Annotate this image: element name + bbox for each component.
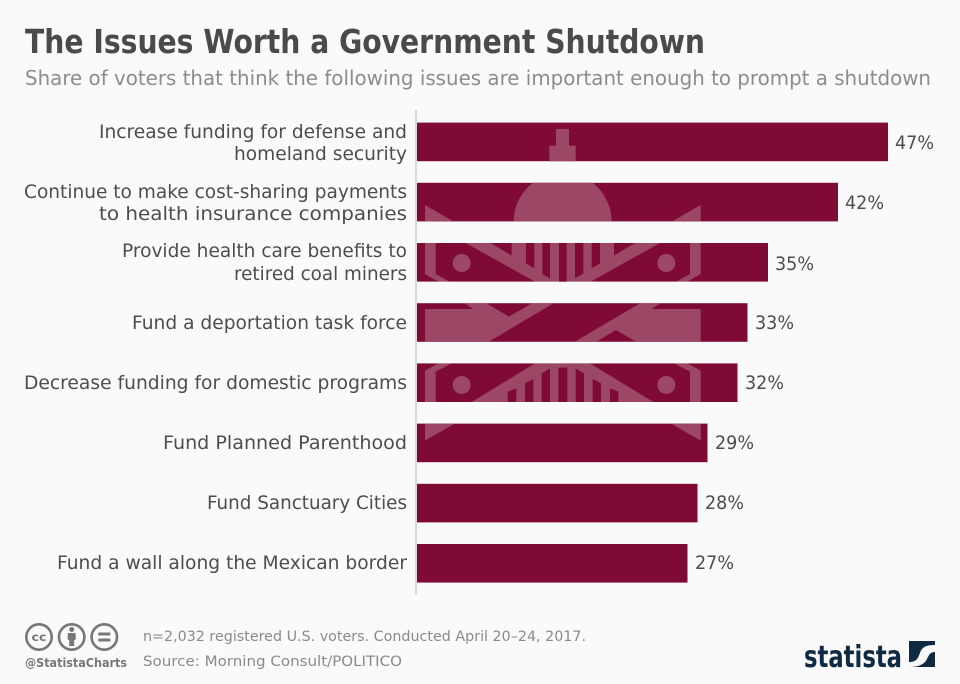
category labels: Fund a deportation task force xyxy=(132,312,407,334)
category labels: Decrease funding for domestic programs xyxy=(24,372,407,394)
axis line xyxy=(415,110,417,595)
value labels: 47% xyxy=(895,132,934,154)
category labels: Continue to make cost-sharing payments xyxy=(24,181,407,203)
category labels: to health insurance companies xyxy=(99,203,407,225)
value labels: 32% xyxy=(745,372,784,394)
footnote: n=2,032 registered U.S. voters. Conducted April 20–24, 2017. xyxy=(143,629,586,645)
value labels: 33% xyxy=(755,312,794,334)
social handle: @StatistaCharts xyxy=(25,656,127,670)
value labels xyxy=(695,132,934,574)
category labels: homeland security xyxy=(234,143,407,165)
value labels: 27% xyxy=(695,552,734,574)
subtitle: Share of voters that think the following issues are important enough to prompt a shutdown xyxy=(25,66,931,90)
category labels: Fund Planned Parenthood xyxy=(163,432,407,454)
category labels: Provide health care benefits to xyxy=(122,240,407,262)
value labels: 42% xyxy=(845,192,884,214)
category labels: Fund Sanctuary Cities xyxy=(207,492,407,514)
bar chart xyxy=(24,110,934,595)
title: The Issues Worth a Government Shutdown xyxy=(25,23,705,61)
bars xyxy=(417,123,888,583)
category labels: retired coal miners xyxy=(234,263,407,285)
source: Source: Morning Consult/POLITICO xyxy=(143,654,402,670)
icon: capitol watermark xyxy=(425,129,701,441)
category labels: Increase funding for defense and xyxy=(99,121,407,143)
category labels: Fund a wall along the Mexican border xyxy=(57,552,407,574)
icon: creative commons licence xyxy=(26,624,117,650)
value labels: 28% xyxy=(705,492,744,514)
value labels: 29% xyxy=(715,432,754,454)
icon: creative commons licence: cc xyxy=(32,630,47,644)
value labels: 35% xyxy=(775,253,814,275)
statista logo: statista xyxy=(804,640,902,675)
category labels xyxy=(24,121,407,574)
